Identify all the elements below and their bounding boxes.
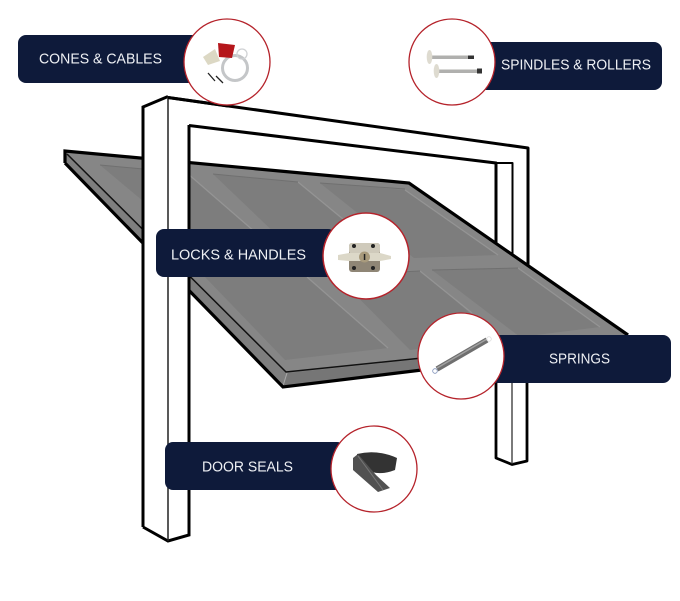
door edge strips — [65, 154, 287, 386]
label: locks and handles: LOCKS & HANDLES — [171, 246, 306, 264]
label: spindles and rollers — [409, 19, 662, 105]
icon circle: cones and cables — [184, 19, 270, 105]
door inset panels — [100, 165, 600, 360]
garage door panel — [65, 151, 628, 387]
door outline — [65, 151, 628, 387]
garage door frame: right post and top beam — [168, 98, 528, 464]
label: springs — [418, 313, 671, 399]
left post of frame — [143, 96, 228, 541]
label: door seals — [165, 426, 417, 512]
label: door seals: DOOR SEALS — [202, 458, 293, 476]
label: spindles and rollers: SPINDLES & ROLLERS — [501, 56, 651, 74]
icon circle: door seals — [331, 426, 417, 512]
label: cones and cables — [18, 19, 270, 105]
icon circle: springs — [418, 313, 504, 399]
icon circle: locks and handles — [323, 213, 409, 299]
label: cones and cables: CONES & CABLES — [39, 50, 162, 68]
label: locks and handles — [156, 213, 409, 299]
label: springs: SPRINGS — [549, 350, 610, 368]
icon circle: spindles and rollers — [409, 19, 495, 105]
